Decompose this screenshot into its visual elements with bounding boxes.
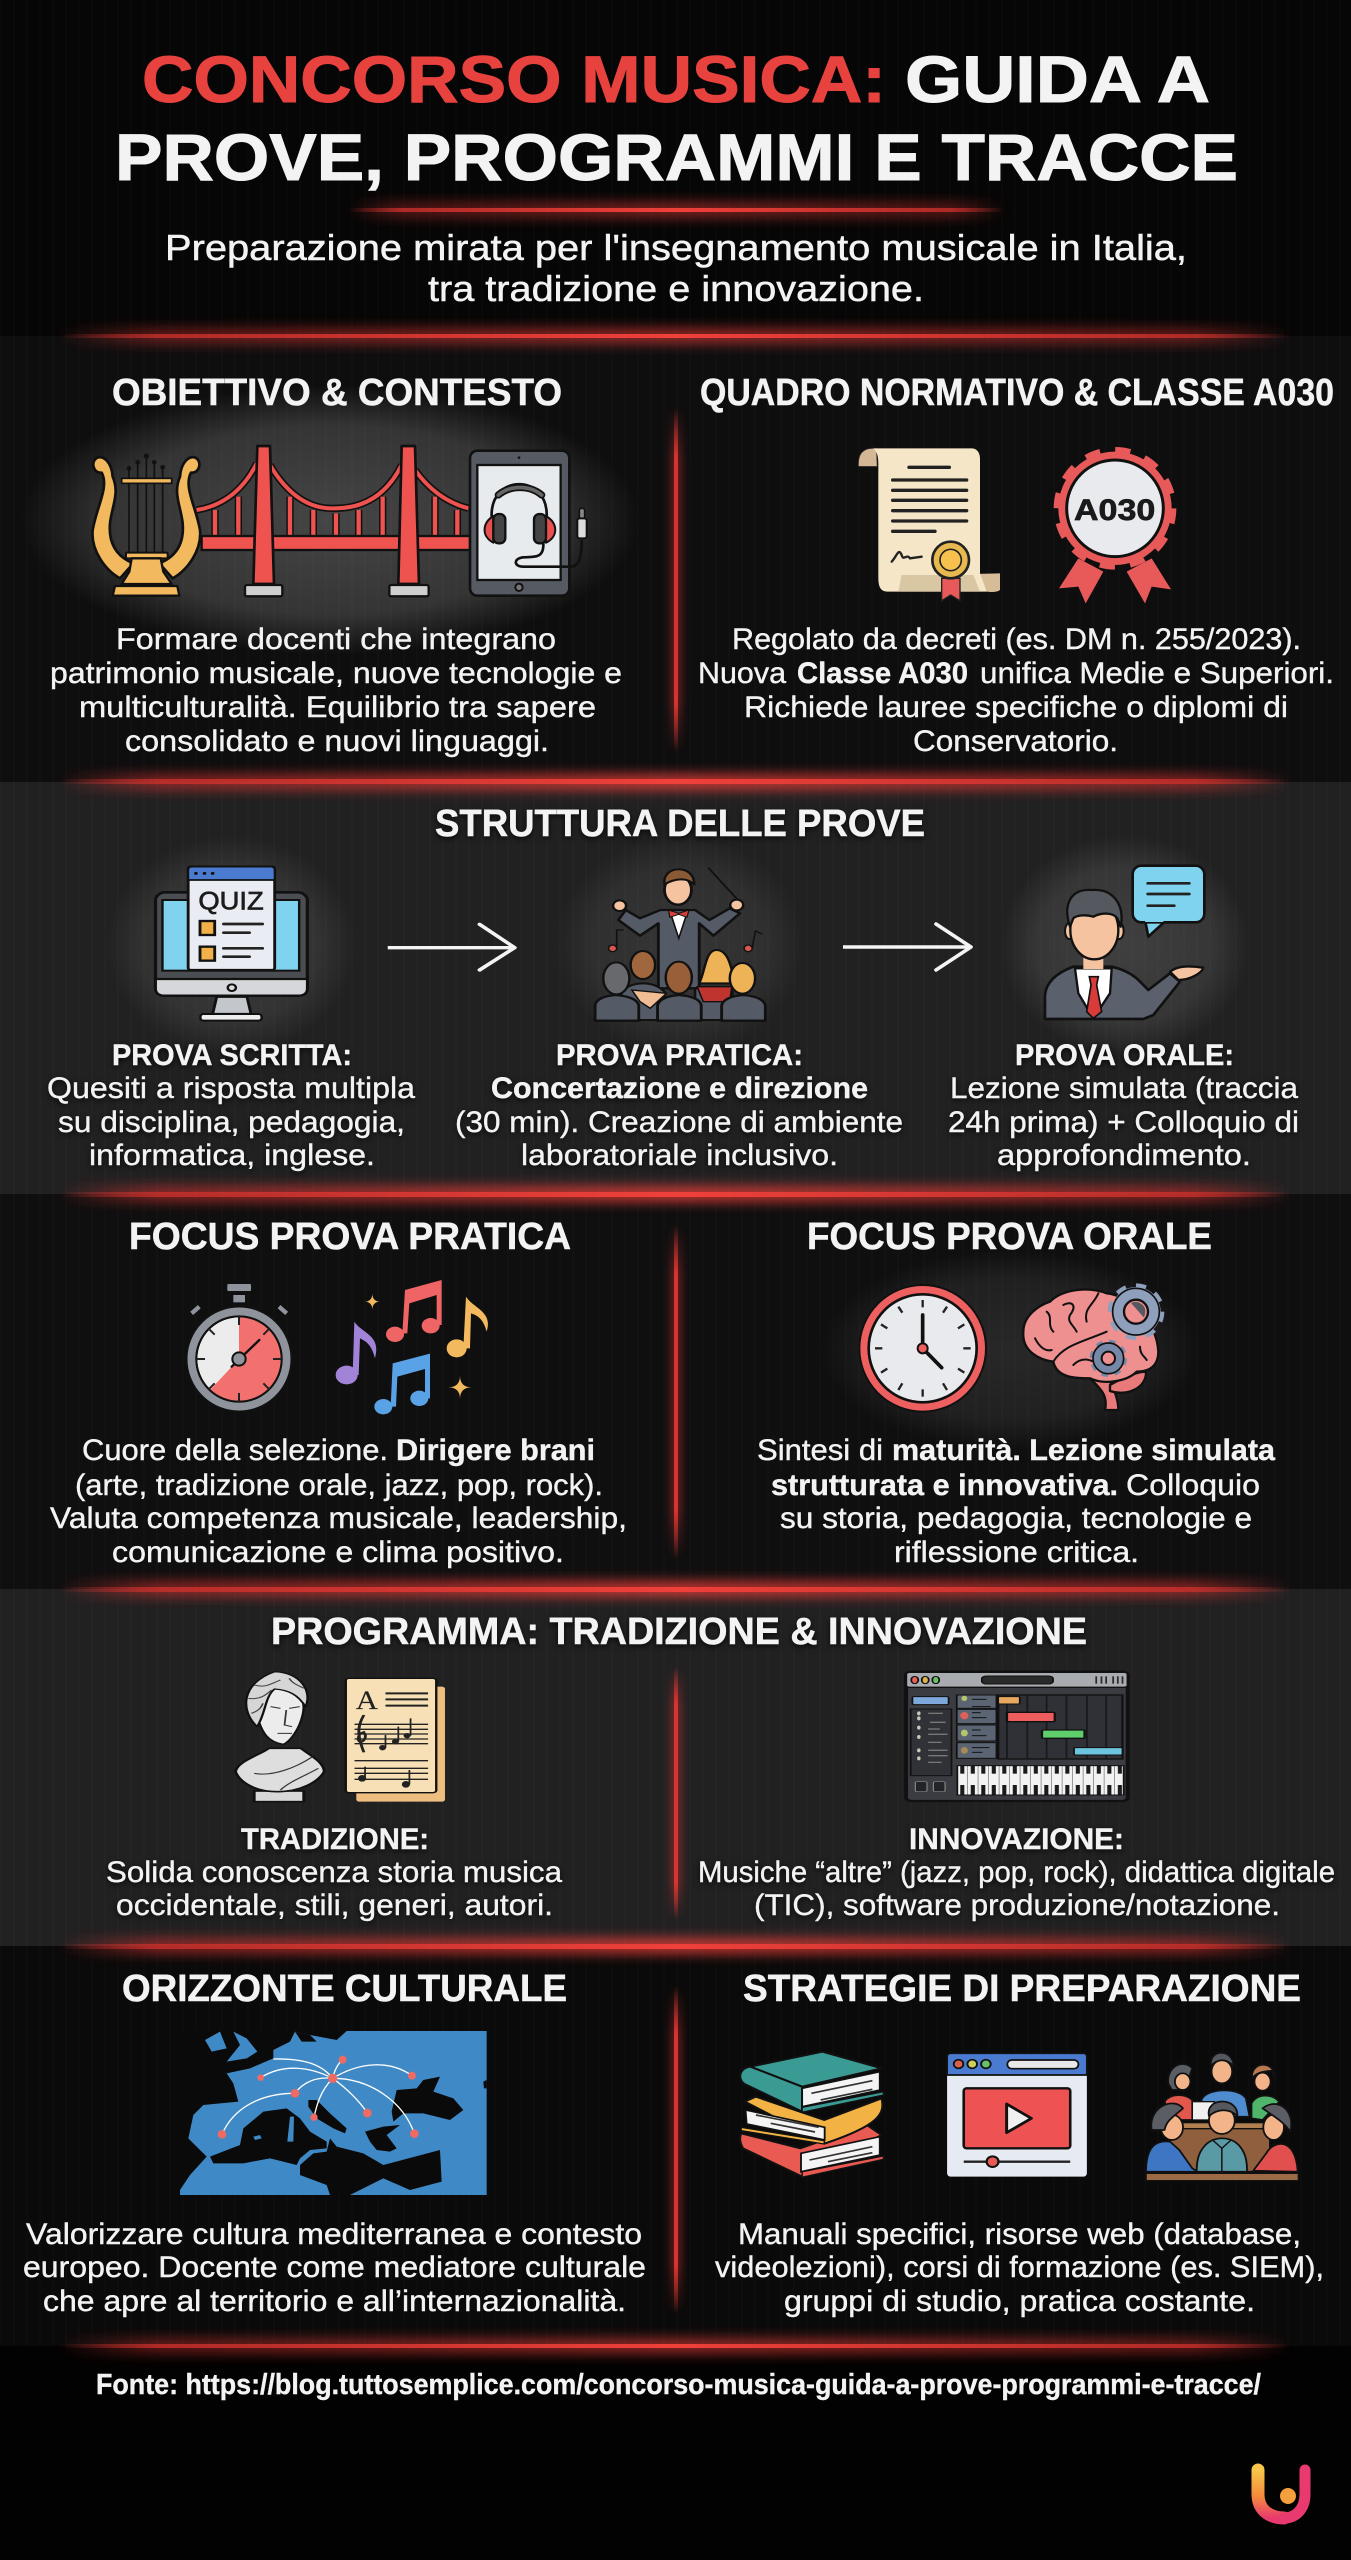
text: obiettivo: multiculturalità. Equilibrio tra sapere [79,691,596,724]
title: CONCORSO MUSICA: [142,42,886,116]
panel: quadro normativo [698,372,1334,758]
heading: focus pratica: FOCUS PROVA PRATICA [129,1216,571,1258]
text: focus orale: Colloquio [1126,1469,1260,1502]
subtitle: tra tradizione e innovazione. [428,268,924,309]
text: prova scritta: su disciplina, pedagogia, [58,1106,405,1139]
text: focus orale: su storia, pedagogia, tecnologie e [780,1502,1252,1535]
text: tradizione: Solida conoscenza storia musica [106,1856,562,1889]
icon: A030 badge [1058,452,1172,603]
text: obiettivo: consolidato e nuovi linguaggi. [125,725,549,758]
heading: strategie: STRATEGIE DI PREPARAZIONE [743,1968,1301,2010]
icon: brain with gears [1023,1287,1161,1410]
text: tradizione: occidentale, stili, generi, autori. [116,1889,553,1922]
title [115,42,1238,194]
subtitle: Preparazione mirata per l'insegnamento musicale in Italia, [165,227,1187,268]
text: obiettivo [50,623,622,758]
icon: study group [1146,2053,1298,2181]
title: GUIDA A [905,42,1210,116]
red separators [60,328,1290,2354]
text: focus orale [757,1434,1275,1569]
icon: music notes [336,1280,488,1414]
text: strategie: videolezioni), corsi di formazione (es. SIEM), [715,2251,1324,2284]
icon: classical bust [236,1672,324,1802]
text: prova orale: PROVA ORALE: [1015,1039,1234,1072]
text: strategie [715,2218,1324,2318]
text: orizzonte: che apre al territorio e all’internazionalità. [43,2285,626,2318]
text: focus pratica: Valuta competenza musicale, leadership, [50,1502,627,1535]
title: PROVE, PROGRAMMI E TRACCE [115,120,1238,194]
text: prova orale: Lezione simulata (traccia [950,1072,1298,1105]
text: focus pratica: (arte, tradizione orale, jazz, pop, rock). [75,1469,603,1502]
panel: programma [106,1611,1335,1922]
text: tradizione [106,1823,562,1922]
icon: quiz monitor: QUIZ [198,886,264,915]
text: prova pratica [455,1039,903,1172]
text: prova pratica: Concertazione e direzione [491,1072,868,1105]
text: quadro normativo [698,623,1334,758]
icon: map of Europe and the Mediterranean [178,2030,487,2196]
text: quadro normativo: Richiede lauree specifiche o diplomi di [744,691,1288,724]
text: innovazione: INNOVAZIONE: [909,1823,1124,1856]
text: prova pratica: PROVA PRATICA: [556,1039,803,1072]
icon: music production software [906,1672,1128,1801]
text: prova orale: 24h prima) + Colloquio di [948,1106,1299,1139]
icon: stopwatch [186,1283,292,1412]
icon: conductor and orchestra [595,868,765,1021]
text: obiettivo: Formare docenti che integrano [116,623,556,656]
title separator [349,202,1004,218]
icon: stack of books [740,2052,883,2177]
arrow 1 [388,924,515,970]
text: prova orale: approfondimento. [997,1139,1251,1172]
text: innovazione: Musiche “altre” (jazz, pop, rock), didattica digitale [698,1856,1335,1889]
heading: programma: PROGRAMMA: TRADIZIONE & INNOVAZIONE [271,1611,1087,1653]
icon: video lesson window [947,2053,1087,2177]
text: prova pratica: (30 min). Creazione di ambiente [455,1106,903,1139]
source line: Fonte: https://blog.tuttosemplice.com/concorso-musica-guida-a-prove-programmi-e-tracce/ [96,2369,1261,2401]
icon: speaker with speech bubble [1045,866,1204,1019]
text: innovazione: (TIC), software produzione/notazione. [754,1889,1280,1922]
text: prova scritta: informatica, inglese. [89,1139,375,1172]
text: focus pratica: comunicazione e clima positivo. [112,1536,564,1569]
text: strategie: Manuali specifici, risorse web (database, [738,2218,1301,2251]
icon: sheet music [346,1678,445,1802]
text: prova pratica: laboratoriale inclusivo. [521,1139,838,1172]
text: quadro normativo: Classe A030 [797,657,968,690]
text: focus orale: Sintesi di [757,1434,883,1467]
text: orizzonte: europeo. Docente come mediatore culturale [23,2251,646,2284]
text: quadro normativo: Conservatorio. [913,725,1118,758]
heading: struttura: STRUTTURA DELLE PROVE [435,803,925,845]
vertical dividers [670,408,682,2314]
text: innovazione [698,1823,1335,1922]
text: focus pratica: Dirigere brani [396,1434,595,1467]
text: orizzonte [23,2218,646,2318]
panel: orizzonte culturale [23,1968,646,2318]
text: prova scritta [47,1039,415,1172]
icon: clock [859,1285,986,1412]
text: prova scritta: Quesiti a risposta multipla [47,1072,415,1105]
icon: lyre, bridge and tablet [92,446,587,596]
text: quadro normativo: Nuova [698,657,786,690]
text: prova scritta: PROVA SCRITTA: [112,1039,352,1072]
icon: decree scroll [858,448,1000,601]
text: focus orale: maturità. Lezione simulata [892,1434,1275,1467]
heading: obiettivo: OBIETTIVO & CONTESTO [112,372,562,414]
subtitle [165,227,1187,309]
text: orizzonte: Valorizzare cultura mediterranea e contesto [26,2218,642,2251]
text: quadro normativo: unifica Medie e Superiori. [980,657,1334,690]
logo [1258,2470,1305,2518]
text: focus pratica [50,1434,627,1569]
icon: A030 badge: A030 [1074,494,1155,527]
text: prova orale [948,1039,1299,1172]
icon: quiz monitor [156,867,307,1021]
text: focus orale: strutturata e innovativa. [771,1469,1118,1502]
heading: orizzonte: ORIZZONTE CULTURALE [122,1968,567,2010]
text: tradizione: TRADIZIONE: [241,1823,429,1856]
panel: struttura delle prove [47,803,1299,1172]
arrow 2 [843,924,971,970]
text: focus orale: riflessione critica. [894,1536,1139,1569]
panel: strategie di preparazione [715,1968,1324,2318]
panel: obiettivo e contesto [50,372,622,758]
heading: focus orale: FOCUS PROVA ORALE [807,1216,1212,1258]
text: strategie: gruppi di studio, pratica costante. [784,2285,1255,2318]
text: quadro normativo: Regolato da decreti (es. DM n. 255/2023). [732,623,1301,656]
panel: focus prova orale [757,1216,1275,1569]
icon: sheet music: A [356,1686,378,1715]
text: focus pratica: Cuore della selezione. [82,1434,388,1467]
panel: focus prova pratica [50,1216,627,1569]
text: obiettivo: patrimonio musicale, nuove tecnologie e [50,657,622,690]
